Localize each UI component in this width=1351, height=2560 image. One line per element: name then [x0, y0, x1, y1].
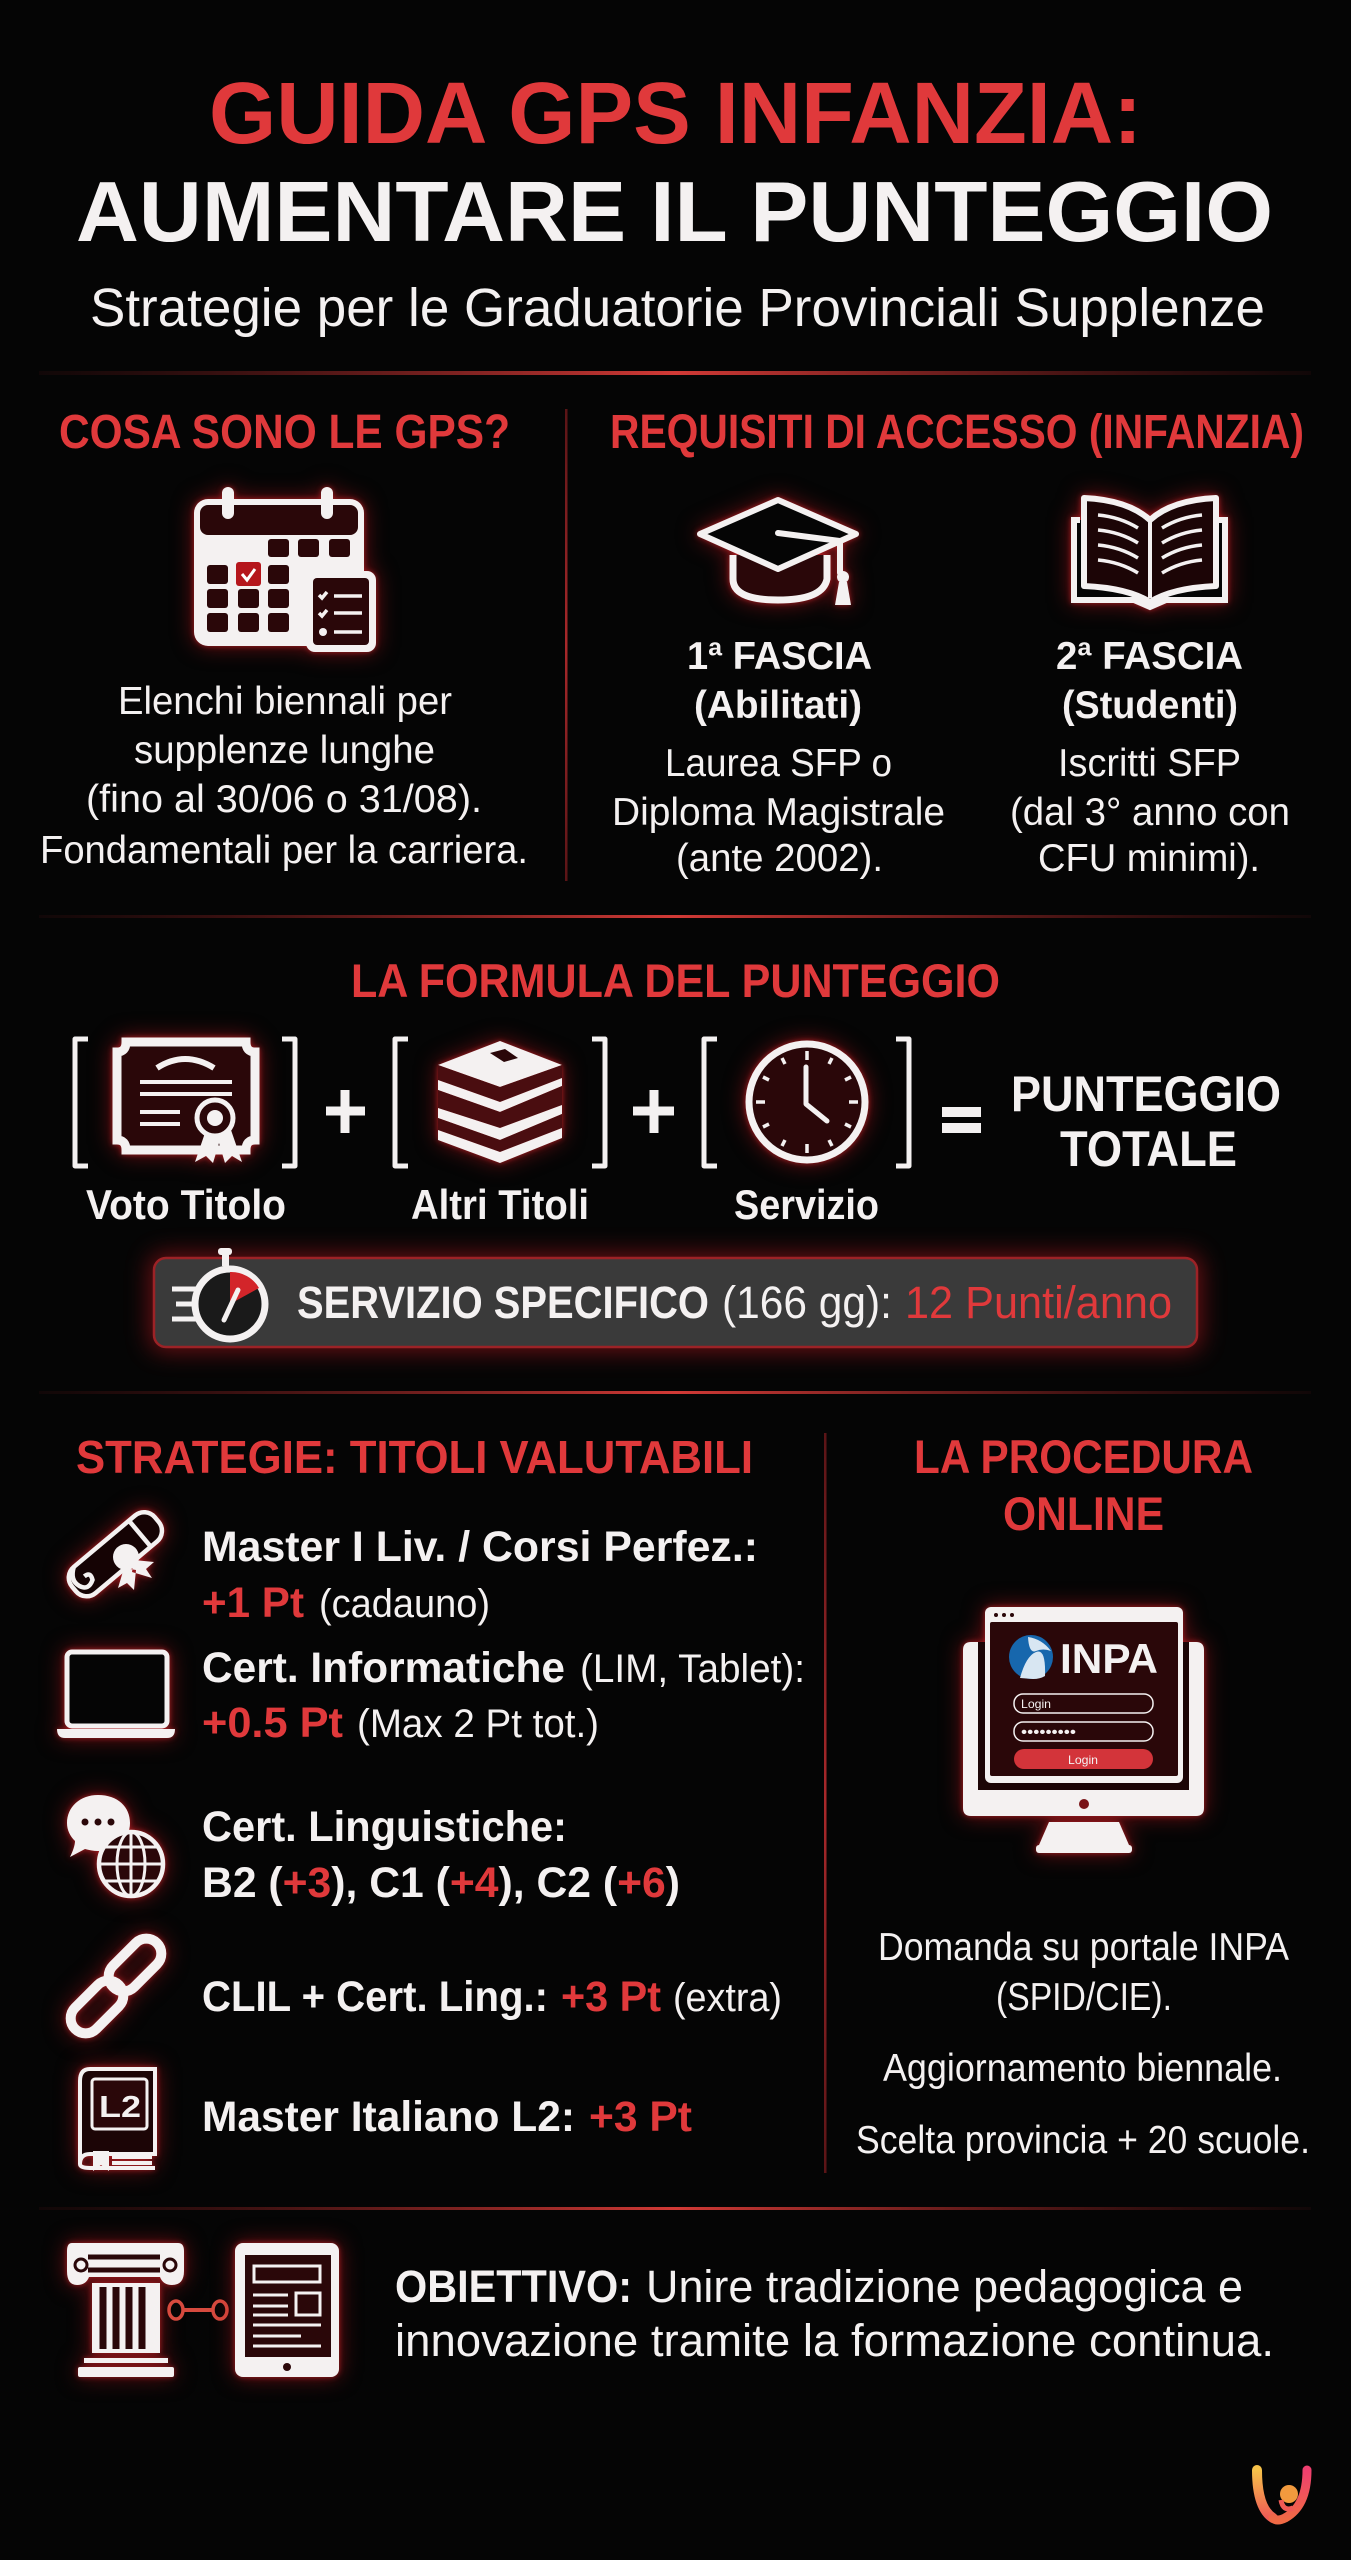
text: GPS description: Elenchi biennali per	[118, 680, 452, 723]
label: altri titoli: Altri Titoli	[411, 1181, 589, 1228]
label: voto titolo: Voto Titolo	[86, 1181, 286, 1228]
panel: obiettivo	[67, 2243, 1274, 2377]
text: GPS description	[40, 680, 528, 872]
icon: monitor with INPA login	[963, 1607, 1204, 1853]
text: punteggio totale	[1011, 1066, 1281, 1177]
title: AUMENTARE IL PUNTEGGIO	[76, 165, 1273, 260]
panel: requisiti di accesso	[610, 406, 1304, 880]
title	[76, 65, 1273, 260]
text: servizio specifico value	[297, 1277, 1172, 1328]
panel: la procedura online	[856, 1430, 1310, 2162]
operator: plus	[326, 1090, 365, 1133]
text: certificazioni informatiche: (LIM, Tablet):	[580, 1647, 805, 1691]
text: 2a fascia	[1010, 635, 1290, 880]
icon: stopwatch	[172, 1248, 265, 1339]
text: GPS description: Fondamentali per la carriera.	[40, 829, 528, 872]
brackets: servizio	[704, 1039, 909, 1166]
text: certificazioni linguistiche	[202, 1803, 680, 1907]
text: master I livello: +1 Pt	[202, 1579, 304, 1627]
form: login	[1014, 1694, 1153, 1769]
text: CLIL	[202, 1973, 782, 2021]
icon: tablet	[235, 2243, 339, 2377]
callout: servizio specifico	[150, 1248, 1201, 1351]
form: login: Login	[1021, 1697, 1051, 1711]
text: 2a fascia: (Studenti)	[1062, 684, 1238, 727]
icon: laptop	[57, 1652, 175, 1738]
subtitle: Strategie per le Graduatorie Provinciali Supplenze	[90, 278, 1265, 338]
text: master I livello	[202, 1523, 758, 1627]
text: obiettivo	[395, 2261, 1274, 2366]
text: 1a fascia: (ante 2002).	[676, 837, 883, 880]
text: obiettivo: OBIETTIVO:	[395, 2261, 632, 2312]
text: certificazioni informatiche: Cert. Informatiche	[202, 1644, 565, 1692]
text: punteggio totale: PUNTEGGIO	[1011, 1066, 1281, 1122]
title: GUIDA GPS INFANZIA:	[209, 65, 1142, 162]
text: master italiano L2: Master Italiano L2:	[202, 2093, 575, 2141]
panel: la formula del punteggio	[75, 954, 1281, 1351]
icon: L2 book: L2	[99, 2089, 141, 2124]
text: 1a fascia: (Abilitati)	[694, 684, 862, 727]
form: login: •••••••••	[1021, 1724, 1076, 1741]
heading: la procedura online	[914, 1430, 1253, 1540]
text: CLIL: +3 Pt	[561, 1973, 661, 2021]
icon: chat and globe	[67, 1795, 163, 1896]
icon: chain link	[64, 1932, 168, 2040]
icon: open book	[1074, 498, 1225, 607]
operator: plus	[633, 1090, 674, 1133]
text: obiettivo: innovazione tramite la formazione continua.	[395, 2315, 1274, 2366]
panel: cosa sono le GPS	[40, 406, 528, 872]
panel: strategie titoli valutabili	[57, 1431, 805, 2171]
text: procedura description: (SPID/CIE).	[996, 1976, 1172, 2019]
text: servizio specifico value: 12 Punti/anno	[905, 1277, 1172, 1328]
text: procedura description	[856, 1926, 1310, 2162]
icon: calendar and checklist	[194, 487, 376, 652]
text: servizio specifico value: (166 gg):	[722, 1277, 892, 1328]
logo: brand mark	[1257, 2470, 1307, 2520]
icon: diploma	[117, 1042, 255, 1163]
text: 2a fascia: 2ª FASCIA	[1056, 635, 1243, 678]
text: 1a fascia: Diploma Magistrale	[612, 791, 945, 834]
text: 2a fascia: Iscritti SFP	[1058, 742, 1241, 785]
text: certificazioni informatiche: +0.5 Pt	[202, 1699, 343, 1747]
icon: clock	[749, 1044, 865, 1160]
text: 1a fascia	[612, 635, 945, 880]
text: procedura description: Domanda su portale INPA	[878, 1926, 1289, 1969]
heading: la procedura online: ONLINE	[1003, 1487, 1164, 1540]
text: master italiano L2: +3 Pt	[589, 2093, 692, 2141]
text: master I livello: Master I Liv. / Corsi Perfez.:	[202, 1523, 758, 1571]
text: certificazioni linguistiche: Cert. Linguistiche:	[202, 1803, 567, 1851]
label: servizio: Servizio	[734, 1181, 879, 1228]
icon: books	[438, 1041, 562, 1163]
heading: la procedura online: LA PROCEDURA	[914, 1430, 1253, 1483]
text: 2a fascia: (dal 3° anno con	[1010, 791, 1290, 834]
text: INPA: INPA	[1060, 1635, 1158, 1682]
icon: L2 book	[80, 2069, 155, 2171]
text: punteggio totale: TOTALE	[1060, 1121, 1237, 1177]
text: 1a fascia: Laurea SFP o	[665, 742, 892, 785]
heading: strategie: STRATEGIE: TITOLI VALUTABILI	[76, 1431, 753, 1483]
heading: la formula: LA FORMULA DEL PUNTEGGIO	[351, 954, 1000, 1007]
heading: cosa sono le GPS: COSA SONO LE GPS?	[59, 406, 510, 459]
connector nodes	[169, 2301, 227, 2319]
text: CLIL: (extra)	[673, 1976, 782, 2020]
text: certificazioni linguistiche: B2 (+3), C1 (+4), C2 (+6)	[202, 1859, 680, 1907]
text: GPS description: supplenze lunghe	[134, 729, 435, 772]
text: 2a fascia: CFU minimi).	[1038, 837, 1260, 880]
text: GPS description: (fino al 30/06 o 31/08).	[86, 778, 482, 821]
text: master I livello: (cadauno)	[319, 1582, 490, 1626]
brackets: altri titoli	[395, 1039, 605, 1166]
text: 1a fascia: 1ª FASCIA	[687, 635, 872, 678]
text: servizio specifico value: SERVIZIO SPECIFICO	[297, 1277, 709, 1328]
brackets: voto titolo	[75, 1039, 295, 1166]
text: obiettivo: Unire tradizione pedagogica e	[646, 2261, 1243, 2312]
text: certificazioni informatiche: (Max 2 Pt tot.)	[357, 1702, 599, 1746]
connector	[176, 2308, 220, 2312]
icon: graduation cap	[700, 500, 856, 605]
form: login: Login	[1068, 1753, 1098, 1767]
text: certificazioni informatiche	[202, 1644, 805, 1747]
operator: equals	[942, 1112, 981, 1128]
text: CLIL: CLIL + Cert. Ling.:	[202, 1973, 548, 2021]
icon: classical column	[67, 2243, 184, 2377]
logo: INPA globe	[1009, 1635, 1053, 1679]
text: procedura description: Scelta provincia + 20 scuole.	[856, 2119, 1310, 2162]
icon: diploma scroll	[63, 1507, 168, 1602]
text: procedura description: Aggiornamento biennale.	[883, 2047, 1282, 2090]
